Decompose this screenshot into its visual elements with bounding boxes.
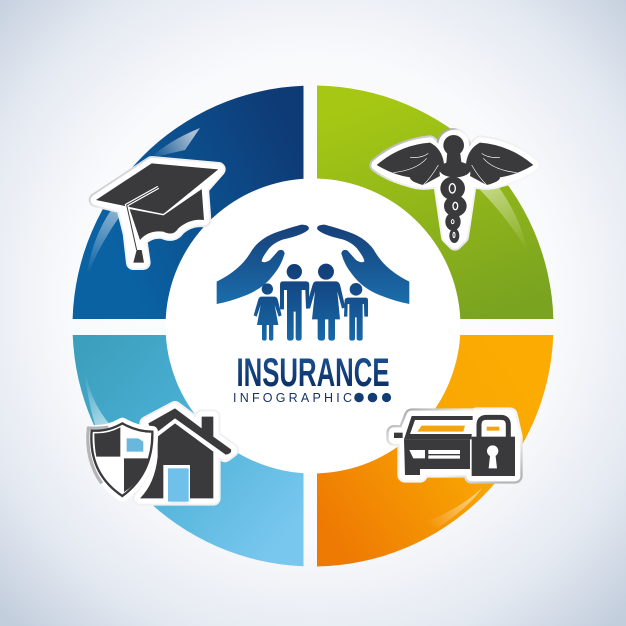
icon: shield (88, 423, 152, 496)
icon: girl (254, 283, 282, 341)
centre white disc (166, 179, 460, 473)
decorative dots (354, 393, 391, 402)
icon: right hand (317, 225, 409, 304)
segment: car, orange (317, 335, 553, 566)
title: INSURANCE: INSURANCE (236, 351, 390, 395)
icon: padlock (472, 417, 515, 476)
icon: caduceus (377, 135, 533, 243)
ring of four segments (73, 86, 553, 566)
icon: father (280, 264, 309, 341)
icon: protecting hands and family (217, 225, 409, 341)
icon: car and padlock (394, 415, 515, 476)
segment: education, dark blue (73, 86, 303, 319)
icon: graduation cap (96, 163, 218, 263)
segment: home, light blue (73, 335, 304, 566)
icon: mother (306, 264, 345, 341)
icon: shield and house (88, 408, 232, 502)
segment: health, green (317, 86, 553, 319)
icon: house (140, 408, 232, 502)
icon: left hand (217, 225, 309, 304)
icon: car (394, 416, 473, 475)
icon: boy (344, 283, 368, 341)
subtitle: INFOGRAPHIC: INFOGRAPHIC (233, 391, 352, 405)
central logo (217, 225, 409, 405)
